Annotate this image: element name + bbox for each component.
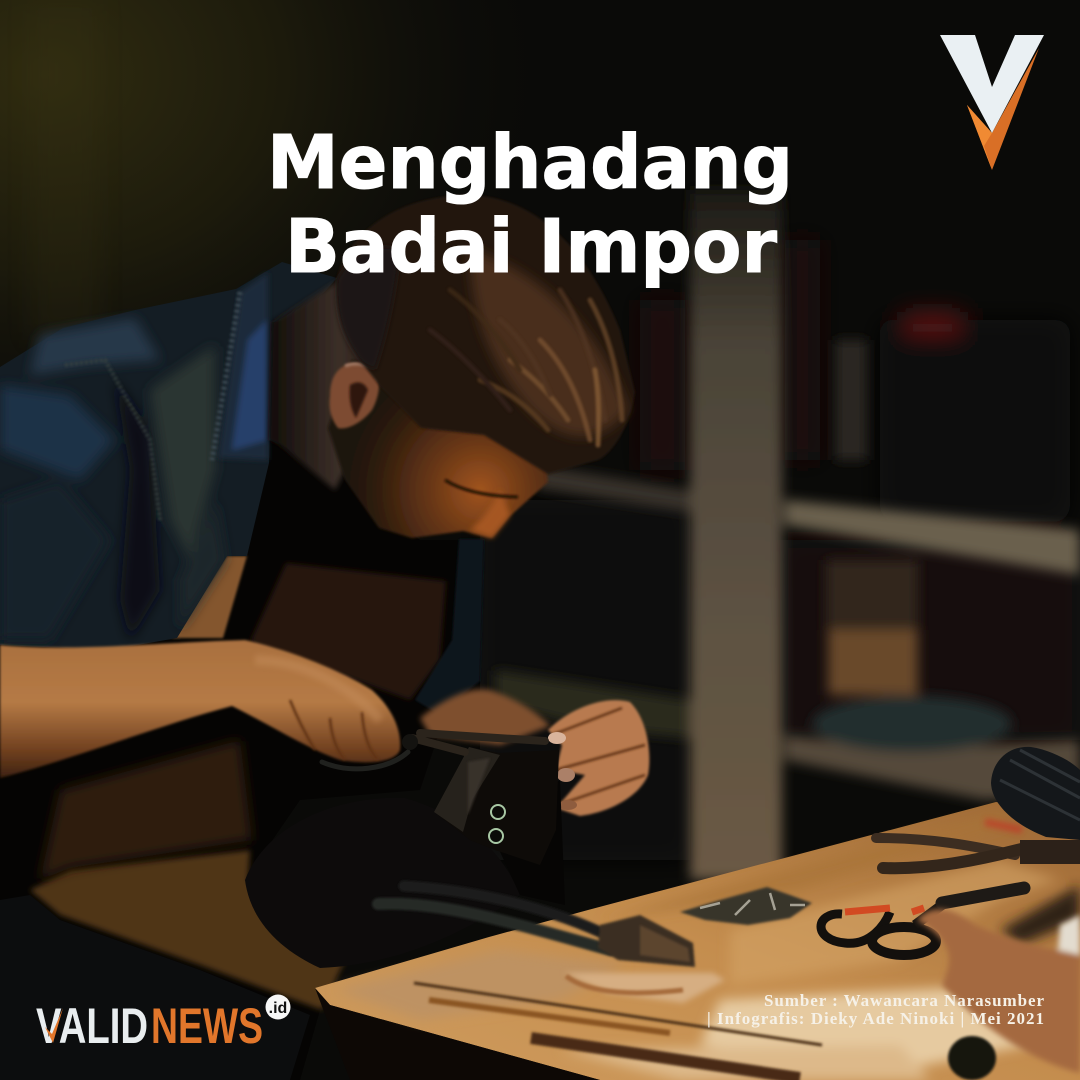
apron and dark shirt bbox=[0, 440, 484, 1080]
spool of thread bbox=[991, 747, 1080, 840]
tools and leather scraps on bench bbox=[414, 973, 996, 1080]
metal scraps bbox=[680, 887, 812, 925]
logo: Validnews wordmark: NEWS bbox=[151, 998, 263, 1054]
black last and boot bbox=[245, 747, 565, 968]
logo: .id badge bbox=[266, 994, 290, 1020]
source credit: | Infografis: Dieky Ade Ninoki | Mei 2021 bbox=[707, 1009, 1044, 1028]
source credit bbox=[707, 991, 1044, 1028]
title: Badai Impor bbox=[285, 204, 777, 290]
blurred hand at right bbox=[917, 909, 1080, 1073]
logo: Validnews wordmark: VALID bbox=[36, 998, 148, 1054]
blurred shelves bbox=[480, 190, 1080, 880]
scissors with red handle bbox=[821, 888, 1024, 955]
source credit: Sumber : Wawancara Narasumber bbox=[764, 991, 1044, 1010]
logo: Validnews wordmark bbox=[36, 994, 290, 1054]
logo: V mark bbox=[940, 35, 1044, 170]
workbench bbox=[315, 802, 1080, 1080]
head: neck, face, ear and hair bbox=[269, 195, 635, 538]
denim jacket bbox=[0, 262, 337, 650]
pliers upper right bbox=[876, 838, 1080, 868]
forearm and right hand bbox=[0, 640, 400, 778]
large pliers on bench bbox=[378, 886, 695, 967]
left arm and hand bbox=[420, 689, 649, 816]
logo: .id badge: .id bbox=[269, 1000, 287, 1017]
title: Menghadang bbox=[267, 120, 793, 206]
title bbox=[267, 120, 793, 290]
pliers in hand bbox=[322, 733, 545, 769]
